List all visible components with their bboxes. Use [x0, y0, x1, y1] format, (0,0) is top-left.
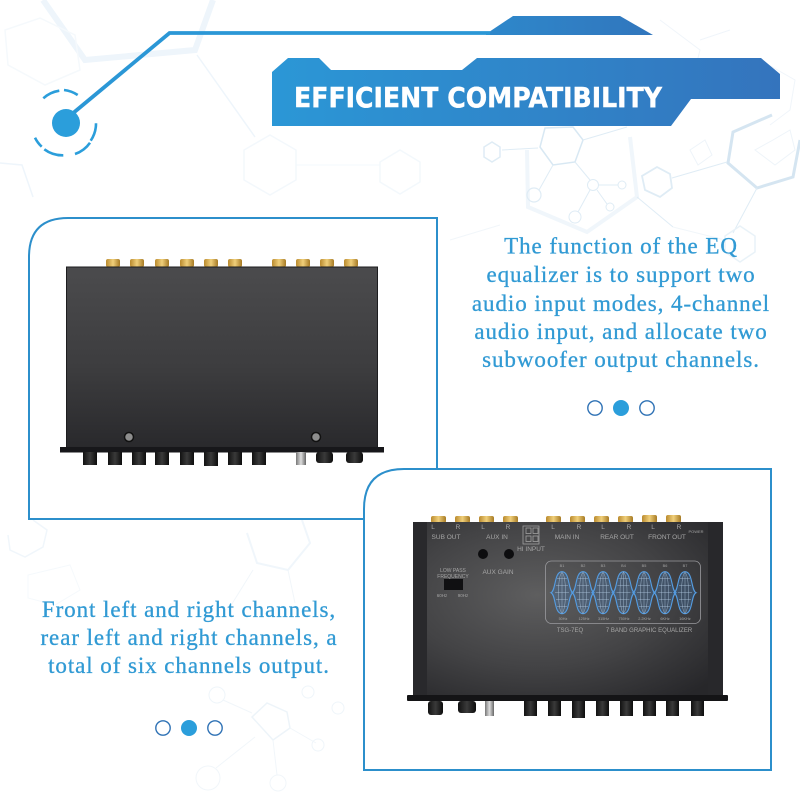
connector line with tab — [72, 16, 653, 114]
jack labels: 7 BAND GRAPHIC EQUALIZER — [606, 628, 693, 634]
jack labels: SUB OUT — [432, 534, 460, 541]
jack labels: R — [577, 524, 582, 531]
jack labels: AUX GAIN — [482, 569, 514, 576]
equalizer graphic: 6KHz — [660, 617, 670, 621]
text block: EQ function: The function of the EQ — [504, 234, 738, 258]
text block: EQ function: subwoofer output channels. — [482, 347, 760, 372]
jack labels: L — [551, 524, 555, 531]
jack labels: 60Hz — [437, 593, 448, 598]
equalizer graphic: 2.2KHz — [638, 617, 651, 621]
product photo: underside of equalizer — [60, 259, 384, 466]
equalizer graphic: B5 — [642, 564, 646, 568]
pagination dots: upper — [588, 400, 654, 416]
jack labels: FRONT OUT — [648, 534, 686, 541]
jack labels: 90Hz — [458, 593, 469, 598]
equalizer graphic: 125Hz — [579, 617, 590, 621]
title banner — [272, 58, 780, 126]
text block: EQ function: audio input modes, 4-channel — [472, 291, 770, 316]
jack labels: L — [431, 524, 435, 531]
equalizer graphic: B1 — [560, 564, 564, 568]
equalizer graphic: B7 — [683, 564, 687, 568]
jack labels: LOW PASS — [440, 568, 467, 574]
panel: rear view frame — [29, 218, 437, 519]
text block: EQ function — [472, 234, 770, 372]
equalizer graphic: B6 — [663, 564, 667, 568]
equalizer graphic: 750Hz — [619, 617, 630, 621]
equalizer graphic: B3 — [601, 564, 605, 568]
product photo: top of equalizer — [407, 515, 728, 718]
text block: channels — [40, 597, 338, 678]
text block: EQ function: audio input, and allocate two — [474, 319, 768, 344]
aux gain knobs — [478, 549, 514, 559]
equalizer graphic — [546, 561, 700, 624]
screws — [124, 432, 320, 442]
jack labels: R — [677, 524, 682, 531]
equalizer graphic: 315Hz — [598, 617, 609, 621]
jack labels: L — [481, 524, 485, 531]
jack labels: L — [651, 524, 655, 531]
equalizer graphic: B2 — [581, 564, 585, 568]
pagination dots: lower — [156, 720, 222, 736]
text block: EQ function: equalizer is to support two — [486, 262, 756, 287]
text block: channels: rear left and right channels, a — [40, 625, 338, 650]
HI input connector — [523, 526, 539, 544]
text block: channels: Front left and right channels, — [42, 597, 336, 622]
jack labels: TSG-7EQ — [557, 628, 583, 634]
jack labels: R — [506, 524, 511, 531]
jack labels: POWER — [688, 529, 704, 534]
jack labels: R — [627, 524, 632, 531]
low pass switch — [444, 579, 463, 590]
equalizer graphic: 16KHz — [679, 617, 691, 621]
panel: top view frame — [364, 469, 771, 770]
equalizer graphic: 50Hz — [559, 617, 568, 621]
jack labels: REAR OUT — [600, 534, 634, 541]
equalizer graphic: B4 — [621, 564, 626, 568]
title: EFFICIENT COMPATIBILITY — [294, 81, 663, 114]
jack labels — [431, 524, 704, 634]
target dot icon — [35, 90, 96, 155]
jack labels: L — [601, 524, 605, 531]
jack labels: R — [456, 524, 461, 531]
text block: channels: total of six channels output. — [48, 653, 330, 678]
jack labels: HI INPUT — [517, 546, 545, 553]
jack labels: MAIN IN — [555, 534, 580, 541]
jack labels: AUX IN — [486, 534, 508, 541]
jack labels: FREQUENCY — [437, 574, 469, 580]
